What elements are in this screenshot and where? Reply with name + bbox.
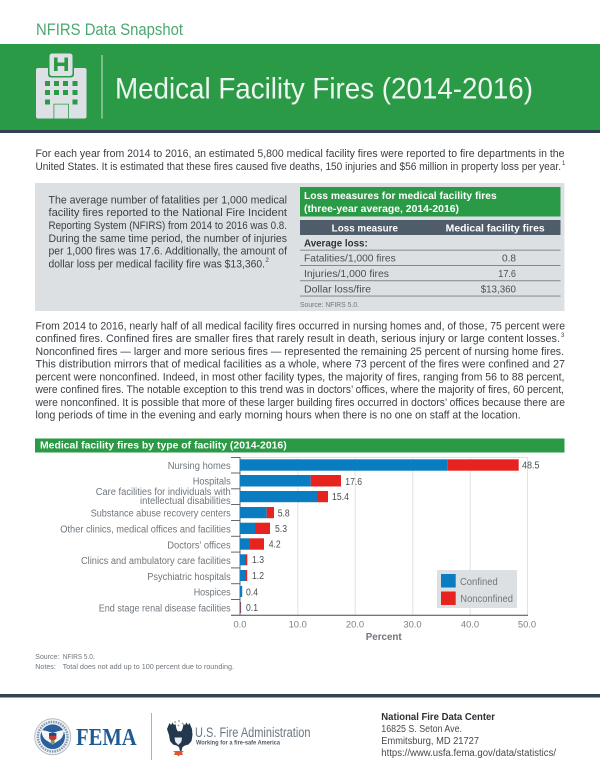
eyebrow: NFIRS Data Snapshot: NFIRS Data Snapshot: [36, 21, 183, 39]
category labels: Care facilities for individuals with: [96, 487, 231, 498]
chart heading band: [35, 438, 564, 452]
value labels: 1.2: [252, 571, 264, 582]
title banner: [0, 44, 600, 133]
bars: confined: [240, 459, 448, 613]
axis tick labels: [233, 619, 536, 630]
source and notes: Notes:: [35, 662, 56, 671]
axis tick labels: 0.0: [233, 619, 247, 630]
table: loss measures: Average loss:: [304, 238, 368, 249]
source and notes: Total does not add up to 100 percent due to rounding.: [63, 662, 234, 671]
table: loss measures: Injuries/1,000 fires: [304, 269, 389, 280]
logo: U.S. Fire Administration: [167, 720, 310, 756]
table: loss measures: Fatalities/1,000 fires: [304, 254, 396, 265]
table: loss measures: 17.6: [498, 269, 516, 280]
axis tick labels: 20.0: [346, 619, 364, 630]
icon: DHS seal: [35, 719, 71, 755]
text block: summary: dollar loss per medical facility fire was $13,360.: [48, 258, 265, 270]
value labels: 0.4: [246, 587, 258, 598]
value labels: [246, 461, 540, 614]
legend: Confined: [460, 577, 498, 588]
text block: summary: The average number of fatalities per 1,000 medical: [48, 194, 287, 206]
body paragraph: This distribution mirrors that of medical facilities as a whole, where 73 percent of the fires were confined and 27: [36, 358, 565, 370]
text block: summary: facility fires reported to the National Fire Incident: [48, 207, 287, 219]
body paragraph: were nonconfined. It is possible that more of these larger building fires occurred in doctors’ offices because there are: [35, 397, 565, 409]
body paragraph: confined fires. Confined fires are smaller fires that rarely result in death, serious injury or large content losses.: [36, 333, 560, 345]
body paragraph: percent were nonconfined. Indeed, in most other facility types, the majority of fires, ranging from 56 to 88 percent,: [36, 371, 564, 383]
chart heading band: Medical facility fires by type of facility (2014-2016): [40, 440, 287, 452]
USFA name: U.S. Fire Administration: [195, 725, 310, 740]
category labels: Doctors’ offices: [167, 540, 231, 551]
contact block: National Fire Data Center: [381, 712, 495, 723]
logo: DHS seal and FEMA: [35, 719, 137, 755]
body paragraph: were confined fires. The notable exception to this trend was in doctors’ offices, where the majority of fires, 60 percent,: [35, 384, 564, 396]
icon: eagle: [167, 720, 192, 756]
table: loss measures: 0.8: [502, 254, 516, 265]
icon: hospital building: [36, 52, 86, 118]
intro paragraph: 1: [562, 161, 566, 167]
intro paragraph: United States. It is estimated that these fires caused five deaths, 150 injuries and $56 million in property loss per year.: [36, 161, 561, 173]
value labels: 1.3: [252, 555, 264, 566]
table: loss measures: Dollar loss/fire: [304, 284, 371, 295]
text block: summary: [48, 194, 288, 270]
contact block: Emmitsburg, MD 21727: [381, 736, 479, 747]
body paragraph: [35, 320, 565, 422]
intro paragraph: For each year from 2014 to 2016, an estimated 5,800 medical facility fires were reported to fire departments in the: [36, 148, 564, 160]
body paragraph: long periods of time in the evening and early morning hours when there is no one on staff at the location.: [36, 410, 521, 422]
text block: summary: During the same time period, the number of injuries: [48, 233, 288, 245]
category labels: Clinics and ambulatory care facilities: [81, 556, 231, 567]
category labels: Psychiatric hospitals: [147, 572, 231, 583]
axis title: Percent: [366, 632, 402, 643]
category labels: Hospitals: [193, 476, 231, 487]
value labels: 0.1: [246, 603, 258, 614]
value labels: 5.8: [278, 509, 290, 520]
FEMA wordmark: FEMA: [76, 724, 137, 751]
body paragraph: 3: [561, 333, 565, 339]
table: loss measures: Loss measure: [332, 224, 399, 234]
text block: summary: Reporting System (NFIRS) from 2014 to 2016 was 0.8.: [48, 220, 287, 232]
intro paragraph: [36, 148, 566, 173]
source and notes: Source:: [35, 652, 59, 661]
title text: Medical Facility Fires (2014-2016): [115, 73, 533, 106]
text block: summary: 2: [266, 258, 270, 264]
table: loss measures: $13,360: [481, 284, 516, 295]
contact block: [381, 712, 556, 759]
contact block: https://www.usfa.fema.gov/data/statistics/: [381, 748, 556, 759]
value labels: 4.2: [269, 539, 281, 550]
category labels: Substance abuse recovery centers: [91, 509, 231, 520]
source and notes: [35, 652, 234, 671]
table: loss measures: (three-year average, 2014-2016): [304, 204, 459, 215]
bar chart: fires by facility type: [60, 457, 540, 643]
table: loss measures: [300, 187, 560, 309]
contact block: 16825 S. Seton Ave.: [381, 724, 462, 735]
category labels: intellectual disabilities: [140, 496, 231, 507]
text block: summary: per 1,000 fires was 17.6. Additionally, the amount of: [48, 246, 288, 258]
legend: Nonconfined: [460, 594, 513, 605]
bars: nonconfined: [240, 459, 519, 613]
USFA tagline: Working for a fire-safe America: [196, 740, 280, 746]
source and notes: NFIRS 5.0.: [63, 652, 95, 661]
value labels: 48.5: [522, 461, 540, 472]
legend: [437, 570, 517, 608]
category labels: Other clinics, medical offices and facilities: [60, 525, 231, 536]
table: loss measures: Loss measures for medical facility fires: [304, 191, 497, 202]
table: loss measures: Medical facility fires: [446, 224, 545, 234]
value labels: 15.4: [332, 492, 349, 503]
category labels: End stage renal disease facilities: [99, 604, 231, 615]
category labels: Nursing homes: [168, 461, 231, 472]
category labels: Hospices: [194, 588, 231, 599]
value labels: 17.6: [345, 477, 362, 488]
body paragraph: Nonconfined fires — larger and more serious fires — represented the remaining 25 percent of nursing home fires.: [36, 346, 564, 358]
axis tick labels: 30.0: [403, 619, 422, 630]
value labels: 5.3: [275, 524, 287, 535]
axis tick labels: 40.0: [461, 619, 479, 630]
category labels: [60, 461, 231, 615]
table: loss measures: Source: NFIRS 5.0.: [300, 300, 359, 309]
axis tick labels: 50.0: [518, 619, 536, 630]
axis tick labels: 10.0: [289, 619, 307, 630]
body paragraph: From 2014 to 2016, nearly half of all medical facility fires occurred in nursing homes and, of those, 75 percent were: [36, 320, 565, 332]
panel: fatalities summary and loss table: [35, 183, 564, 311]
